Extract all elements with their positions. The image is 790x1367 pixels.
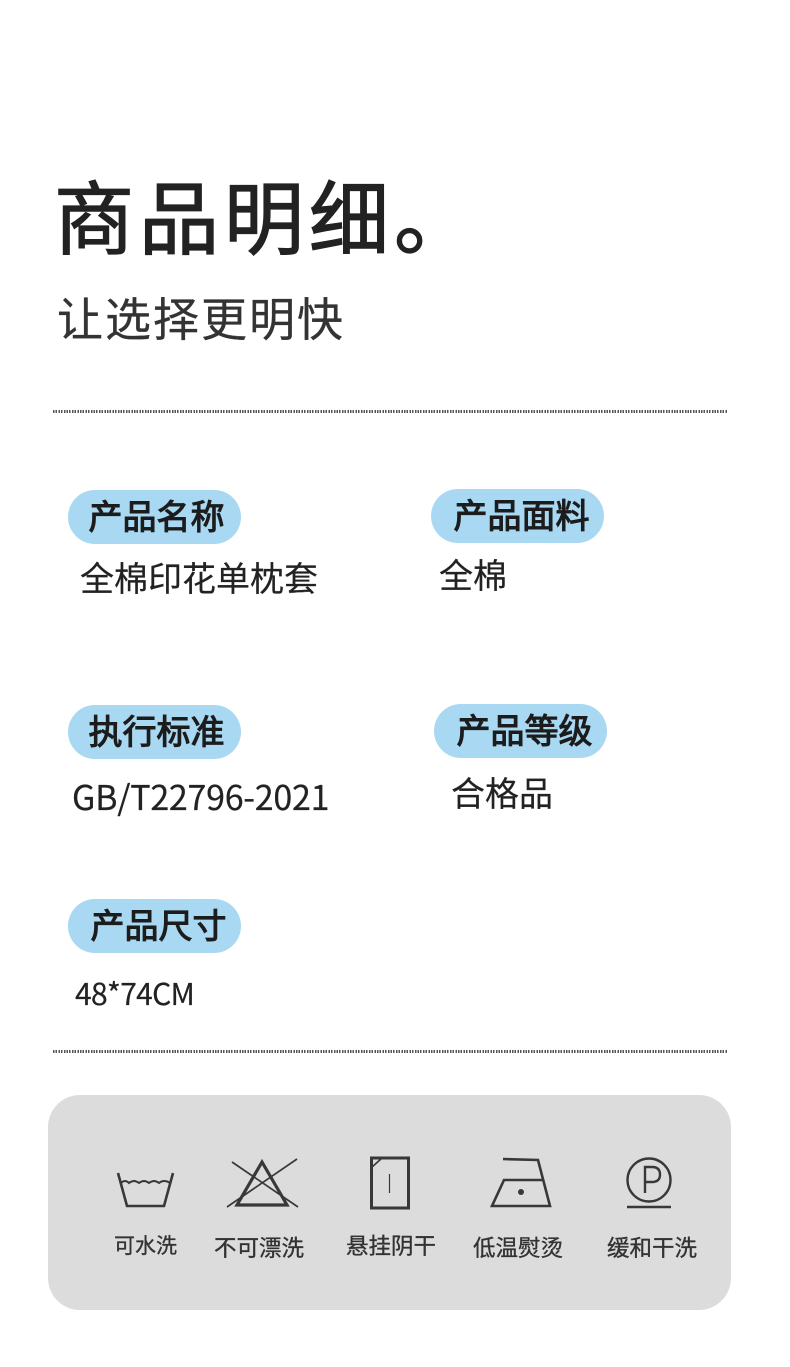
value: fabric: 全棉 <box>439 549 507 598</box>
caption: do not bleach: 不可漂洗 <box>214 1231 304 1263</box>
title: 商品明细。 <box>54 156 479 272</box>
value: size: 48*74CM <box>75 970 194 1014</box>
value: grade: 合格品 <box>451 767 553 816</box>
icon: low temperature iron <box>490 1158 552 1208</box>
label: fabric: 产品面料 <box>454 489 590 538</box>
caption: washable: 可水洗 <box>114 1230 177 1260</box>
label: standard: 执行标准 <box>88 705 224 754</box>
label: grade: 产品等级 <box>456 704 592 753</box>
subtitle: 让选择更明快 <box>57 284 345 350</box>
value: standard: GB/T22796-2021 <box>72 771 329 820</box>
icon: gentle dry clean <box>626 1157 672 1208</box>
value: product name: 全棉印花单枕套 <box>80 552 318 601</box>
caption: low temperature iron: 低温熨烫 <box>473 1231 563 1263</box>
label: size: 产品尺寸 <box>90 899 226 948</box>
caption: hang dry in shade: 悬挂阴干 <box>346 1229 436 1261</box>
panel: care instructions <box>48 1095 731 1310</box>
icon: hang dry in shade <box>370 1156 410 1210</box>
caption: gentle dry clean: 缓和干洗 <box>607 1231 697 1263</box>
icon: washable <box>116 1172 174 1208</box>
icon: do not bleach <box>226 1158 298 1208</box>
label: product name: 产品名称 <box>88 490 224 539</box>
